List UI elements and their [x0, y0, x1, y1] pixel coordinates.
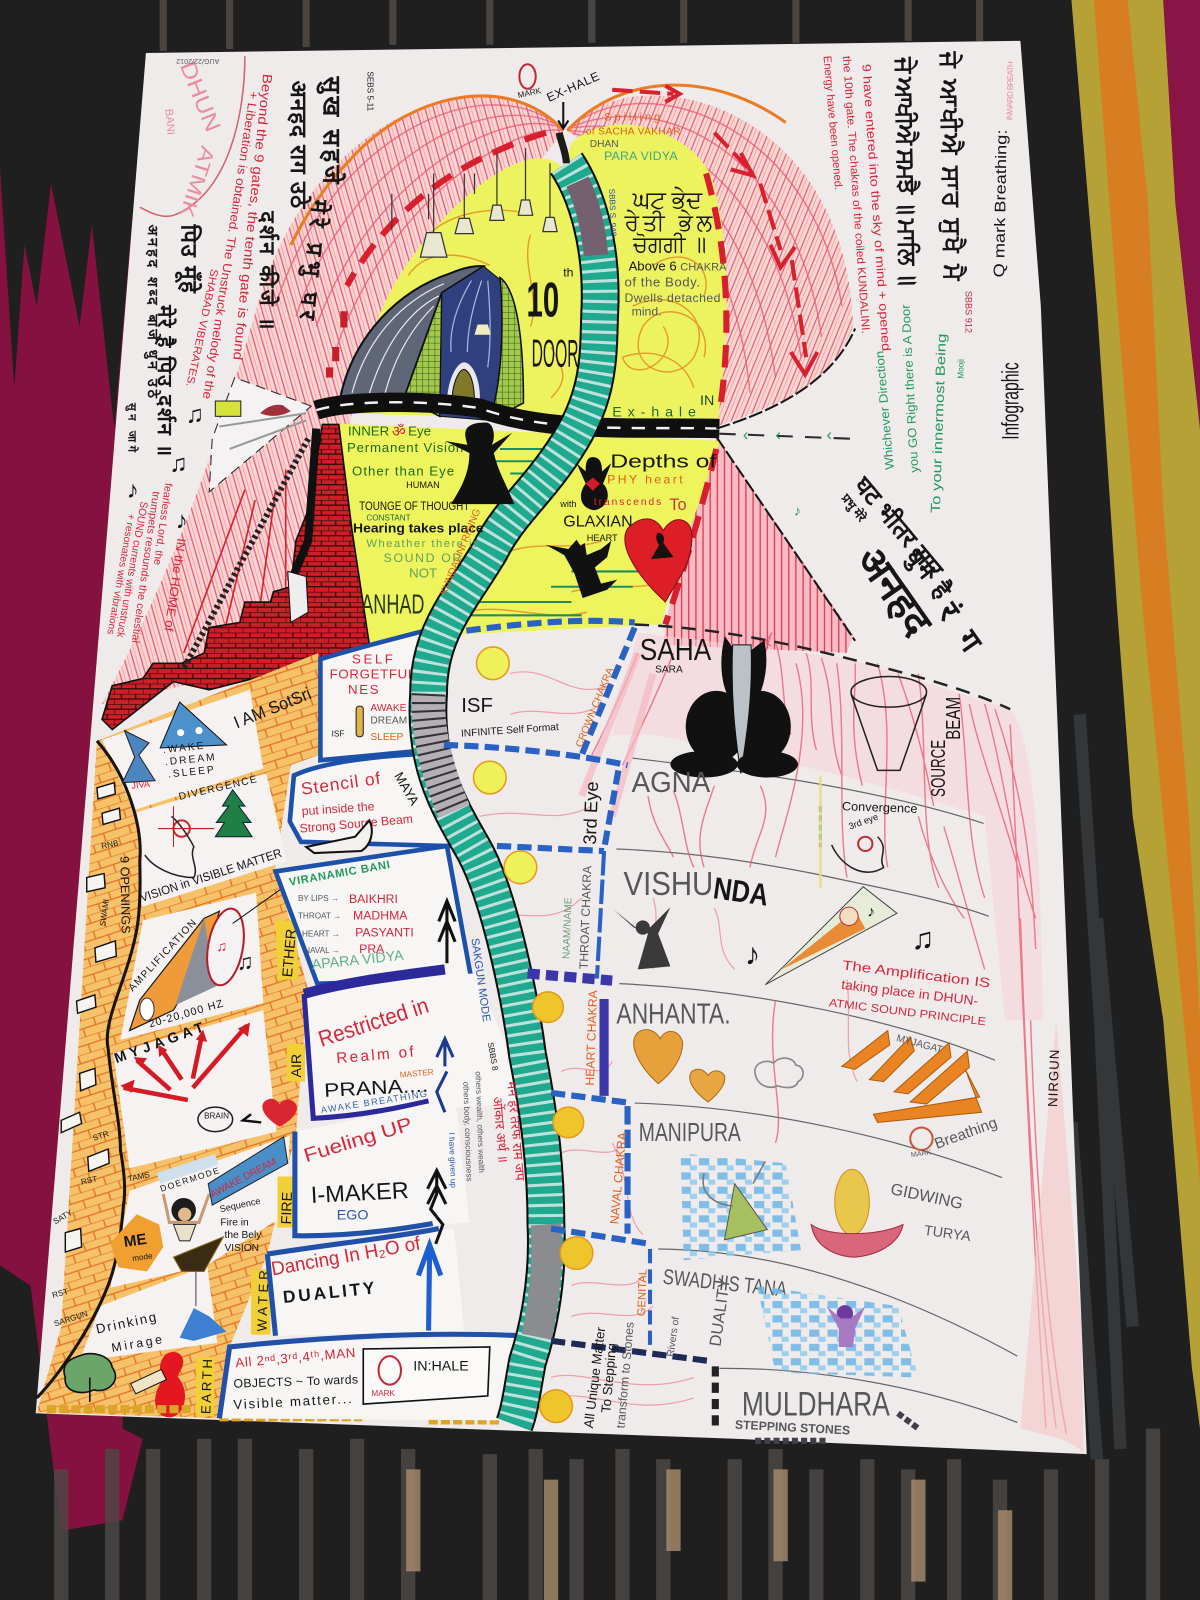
gurmukhi verse centre: ਰੇਤੀ ਭੇਲ — [623, 210, 712, 236]
earth label: EARTH — [198, 1359, 215, 1414]
convergence eye: Convergence — [842, 799, 918, 816]
panel: self forgetful: ISF — [332, 730, 344, 739]
tenth door dome — [340, 266, 523, 420]
hindi verse columns left — [125, 76, 346, 456]
panel: viranamic bani: PASYANTI — [355, 926, 414, 940]
chakra name: muldhara: STEPPING STONES — [735, 1418, 850, 1438]
depths of heart text: GLAXIAN — [563, 514, 633, 531]
whirling dervish figures — [445, 422, 617, 598]
brick gate labels: RST — [51, 1287, 69, 1300]
vertical notes and sakgun mode: SBBS 8 — [486, 1042, 500, 1072]
yellow inner field upper — [342, 125, 727, 423]
q mark breathing: Q mark Breathing: — [991, 129, 1011, 278]
top right hindi columns: ਜੇ ਆਖੀਐ ਸਾਰ ਸੁਖੈ ਮੈ — [935, 51, 968, 282]
hindi verse columns left: मेरे है पिउ दर्शन ॥ — [153, 304, 177, 456]
mark breathing — [910, 1114, 1000, 1159]
musical notes left — [127, 401, 204, 535]
depths of heart text: HEART — [587, 533, 618, 543]
hindi verse columns left: अनहद राग उठे — [286, 81, 312, 209]
chakra name: swadhistana: To Stepping — [598, 1343, 619, 1414]
depths of heart text: with — [559, 499, 577, 509]
arrows on right cone: ♪ — [794, 503, 801, 519]
panel: fueling up — [295, 1098, 469, 1236]
myjagat arrows panel: BRAIN — [204, 1111, 229, 1120]
amplification cone right: ♪ — [745, 937, 760, 971]
top-left title: dhun atmik bani: BANI — [162, 108, 177, 136]
panel: restricted — [304, 969, 531, 1118]
chakra name: swadhistana: SWADHIS TANA — [662, 1265, 789, 1302]
red verse: beyond the nine gates — [183, 73, 275, 400]
q mark breathing: INWARD BREATH — [1005, 61, 1015, 120]
meditating black figure — [670, 640, 798, 778]
ether label: ETHER — [280, 928, 300, 978]
panel: self forgetful: AWAKE — [370, 703, 407, 714]
divergence panel: VISION in VISIBLE MATTER — [138, 846, 284, 905]
hearing text: NOT — [409, 566, 437, 581]
nine openings boundary curve — [37, 741, 140, 1398]
panel: fueling up: EGO — [337, 1207, 368, 1223]
tenth door heading — [527, 266, 579, 375]
inner eye text: ॐ — [392, 424, 406, 441]
panel: restricted: AWAKE BREATHING — [320, 1089, 428, 1115]
panel: viranamic bani: THROAT → — [298, 911, 341, 920]
dancer with me-mode: Sequence — [219, 1196, 261, 1214]
brick gate labels: RST — [80, 1174, 98, 1187]
drinking mirage: Drinking — [94, 1309, 157, 1337]
gidwing turiya: GIDWING — [889, 1180, 965, 1213]
green door verse: Whichever Direction — [872, 350, 897, 470]
red dashed lobe edge — [347, 133, 726, 624]
brick gate labels: TAMS — [127, 1170, 151, 1184]
road — [316, 402, 719, 429]
panel: inhale ground: MARK — [371, 1389, 396, 1398]
chakra name: vishunda — [561, 865, 771, 969]
chakra name: anhanta: ANHANTA. — [616, 998, 731, 1030]
panel: inhale ground: IN:HALE — [413, 1358, 469, 1374]
water and purple figure — [757, 1286, 918, 1378]
brain cloud — [755, 1058, 803, 1088]
wake dream sleep panel: JIVA — [131, 779, 151, 791]
red verse: beyond the nine gates: Beyond the 9 gates, the tenth gate is found — [230, 73, 275, 361]
saha heading: SARA — [655, 664, 683, 675]
mark box — [363, 1347, 490, 1404]
panel: self forgetful: FORGETFUL — [330, 667, 415, 682]
chakra name: agna: AGNA — [632, 767, 710, 799]
panel: self forgetful — [320, 624, 449, 760]
top mark and ex-hale: EX-HALE — [545, 69, 601, 105]
spilling text: PARA VIDYA — [604, 149, 678, 163]
dancer with me-mode: the Bely — [224, 1230, 262, 1241]
top right hindi columns — [890, 51, 968, 286]
fire label: FIRE — [279, 1192, 296, 1225]
ether label — [275, 920, 300, 980]
pebble edge — [47, 1409, 500, 1420]
inner eye text: Other than Eye — [352, 464, 454, 479]
above six chakras note: of the Body. — [624, 275, 700, 290]
red verse: beyond the nine gates: SHABAD VIBERATES. — [183, 268, 220, 388]
brick gate labels: RNB — [101, 838, 120, 851]
divergence panel — [138, 774, 284, 905]
panel: restricted: PRANA.... — [324, 1075, 429, 1102]
tenth door heading: th — [563, 266, 574, 280]
myjagat arrows panel — [112, 1020, 297, 1132]
water and dancer manipura — [681, 1153, 801, 1260]
orange myjagat arrows — [842, 1031, 982, 1122]
white gate doors — [61, 783, 120, 1252]
hearing text: TOUNGE OF THOUGHT — [359, 499, 470, 513]
chakra name: swadhistana: DUALITY — [707, 1277, 734, 1347]
hindi verse columns left: पिउ मूँहे — [175, 223, 203, 294]
amplification panel: ♫ — [237, 949, 254, 974]
hindi verse columns left: सुख सहजे — [316, 76, 346, 185]
top right red verse: the 10th gate. The chakras of the coiled KUNDALINI. — [840, 55, 871, 334]
large hindi verse diagonal: रंग — [930, 596, 989, 659]
dancer with me-mode — [110, 1137, 288, 1341]
red verse: in the home: fearless Lord, the — [151, 482, 174, 566]
dancer with me-mode: DOERMODE — [159, 1165, 220, 1194]
red verse: in the home — [104, 482, 188, 644]
gurmukhi verse centre: ਚੋਗਗੀ ॥ — [632, 232, 706, 257]
gidwing turiya: TURYA — [923, 1223, 972, 1245]
hearing text: CONSTANT — [366, 513, 411, 522]
wake dream sleep panel: .WAKE — [162, 741, 206, 756]
exhale in: Ex-hale — [612, 404, 696, 420]
chakra name: muldhara: MULDHARA — [742, 1385, 890, 1423]
top-left title: dhun atmik bani: AUG/22/2012 — [176, 57, 219, 65]
chakra name: agna — [579, 767, 710, 845]
musical notes left: ♪ — [176, 508, 188, 535]
panel: inhale ground: OBJECTS ~ To wards — [233, 1372, 358, 1391]
chakra name: manipura — [607, 1119, 741, 1225]
amplification cone right: The Amplification IS — [841, 957, 991, 991]
air label — [287, 1044, 305, 1082]
amplification cone right: ♪ — [867, 903, 875, 920]
ascending arrows — [418, 901, 455, 1331]
panel: self forgetful: SLEEP — [370, 732, 403, 743]
spine: kundalini ribbon — [428, 133, 600, 1424]
icon: heart — [262, 1099, 297, 1127]
depths of heart text: transcends — [594, 497, 661, 508]
vertical notes and sakgun mode: SAKGUN MODE — [468, 938, 492, 1023]
dancer with me-mode: Fire in — [220, 1218, 249, 1229]
drinking mirage: Mirage — [110, 1332, 163, 1355]
chakra name: crown: CROWN CHAKRA — [574, 666, 616, 749]
chakra lines grey curves — [616, 758, 1017, 1422]
large hindi verse diagonal: धुन है — [899, 542, 957, 605]
chakra name: muldhara — [735, 1385, 918, 1441]
arrows on right cone: ‹ — [743, 426, 748, 444]
fire label — [278, 1177, 296, 1228]
amplification panel: ♫ — [216, 939, 227, 955]
chakra name: swadhistana: GENITAL — [636, 1269, 650, 1316]
hearing text: Hearing takes place — [353, 521, 484, 536]
red verse: in the home: SOUND currents with unstruck — [114, 500, 150, 639]
panel: restricted: MASTER — [399, 1068, 434, 1080]
arrows on the fan — [612, 90, 806, 357]
top right red verse: Energy have been opened. — [820, 55, 844, 191]
red heart with meditator — [625, 519, 692, 602]
depths of heart text: PHY heart — [607, 473, 683, 487]
panel: stencil: Stencil of — [300, 768, 382, 799]
dancer with me-mode: AWAKE DREAM — [208, 1156, 279, 1201]
hearing text — [353, 189, 618, 619]
infographic label: Infographic — [997, 362, 1024, 440]
gurmukhi verse centre — [623, 187, 712, 257]
nine openings label: 9 OPENINGS — [117, 856, 133, 934]
left road cone — [209, 378, 311, 492]
panel: inhale ground — [219, 1334, 520, 1420]
brick gate labels: SWAMI — [98, 898, 111, 927]
panel: viranamic bani: MADHMA — [353, 908, 408, 922]
source beam cone — [851, 677, 965, 797]
brick gate labels: SATY — [52, 1208, 75, 1226]
chakra name: vishunda: THROAT CHAKRA — [577, 865, 594, 969]
icon: gold hearts — [634, 1030, 683, 1084]
hearing text: KUNDALINI RISING — [439, 507, 483, 597]
poster sheet — [36, 41, 1087, 1454]
spilling text — [586, 111, 681, 163]
chakra name: agna: 3rd Eye — [579, 781, 602, 845]
hearing text: SOUND OR — [384, 551, 461, 565]
green door verse — [872, 304, 965, 513]
white vision panels — [80, 690, 290, 1361]
musical notes left: ♫ — [169, 450, 188, 477]
nirgun label: NIRGUN — [1045, 1048, 1062, 1107]
yellow inner field lower — [335, 423, 720, 645]
panel: viranamic bani: BAIKHRI — [349, 892, 398, 906]
wake dream sleep panel: .SLEEP — [168, 765, 216, 781]
dancer with me-mode: ME — [123, 1231, 148, 1251]
chakra name: swadhistana: transform to Stones — [614, 1321, 637, 1429]
panel: self forgetful: NES — [348, 682, 379, 697]
inner eye text: Eye — [408, 424, 431, 439]
orange brick wall — [37, 653, 318, 1418]
hearing text: ANHAD — [361, 588, 424, 619]
top-left title: dhun atmik bani: DHUN — [175, 58, 226, 135]
mark breathing: Breathing — [932, 1114, 1000, 1153]
saha heading: SAHA — [640, 633, 712, 667]
gidwing turiya — [889, 1180, 972, 1245]
drinking mirage — [64, 1309, 185, 1417]
green door verse: Mooji — [956, 359, 965, 379]
air label: AIR — [289, 1054, 305, 1078]
convergence eye — [820, 776, 918, 888]
vertical notes and sakgun mode: others body, consciousness — [461, 1081, 474, 1182]
panel: viranamic bani: NAVAL → — [304, 946, 340, 955]
tenth door heading: 10 — [527, 273, 559, 327]
chakra name: manipura: MANIPURA — [639, 1119, 741, 1147]
diya lamp and flame — [811, 1169, 903, 1257]
hanging bells — [392, 148, 557, 257]
panel: restricted: Restricted in — [315, 993, 432, 1052]
dancing figure throat — [613, 907, 670, 969]
amplification cone right: taking place in DHUN- — [840, 977, 979, 1009]
green door verse: you GO Right there is A Door — [899, 304, 921, 473]
red verse: beyond the nine gates: + Liberation is obtained. The Unstruck melody of the — [200, 90, 261, 400]
large hindi verse diagonal: घट भीतर सार — [848, 470, 950, 584]
amplification cone right — [745, 887, 991, 1028]
arrows on right cone: ‹ — [776, 426, 781, 444]
mark breathing: MARK — [910, 1148, 932, 1159]
gurmukhi verse centre: ਘਟ ਭੇਦ — [632, 187, 703, 214]
top-left title: dhun atmik bani: ATMIK — [174, 143, 218, 220]
chakra name: vishunda: NDA — [711, 871, 771, 913]
orange myjagat arrows: MYJAGAT — [895, 1033, 944, 1056]
amplification panel — [127, 886, 286, 1031]
water label: WATER — [254, 1270, 271, 1332]
wake dream sleep panel: I AM SotSri — [231, 683, 314, 732]
chakra dashed borders — [444, 621, 1010, 1428]
depths of heart text: Depths of — [610, 450, 718, 471]
red brick tower and stepped city — [102, 424, 369, 730]
top mark and ex-hale: MARK — [517, 86, 542, 100]
above six chakras note — [624, 258, 727, 318]
chakra name: vishunda: VISHU — [623, 866, 713, 903]
vertical notes and sakgun mode: others wealth, others wealth — [474, 1071, 486, 1173]
source beam cone: BEAM — [943, 697, 965, 740]
vertical notes and sakgun mode — [447, 938, 528, 1188]
scribbles — [408, 210, 706, 615]
depths of heart text: To — [669, 496, 687, 514]
panel: viranamic bani: HEART → — [302, 930, 340, 939]
chakra name: anhanta — [583, 989, 731, 1102]
convergence eye: 3rd eye — [847, 812, 879, 831]
inner eye text — [347, 424, 463, 490]
top mark and ex-hale — [517, 64, 601, 129]
vertical notes and sakgun mode: I have given up — [447, 1132, 458, 1188]
dashed breath line with arrows — [719, 434, 852, 439]
hindi verse columns left: सुन जागे — [125, 402, 140, 453]
chakra name: vishunda: NAAM/NAME — [561, 897, 575, 959]
panel: viranamic bani — [276, 846, 471, 984]
panel: stencil — [290, 753, 480, 853]
large hindi verse diagonal: प्रभु मेरे — [837, 490, 870, 526]
top right hindi columns: ਜੇ ਆਖੀਐ ਸਮਝੈ ॥ ਮਾਲਿ ॥ — [890, 56, 923, 286]
source beam cone: SOURCE — [928, 740, 950, 797]
panel: viranamic bani: VIRANAMIC BANI — [288, 859, 391, 889]
panel: dancing — [267, 1229, 464, 1336]
panel: inhale ground: Visible matter... — [233, 1391, 352, 1412]
amplification panel: AMPLIFICATION — [127, 918, 199, 994]
panel: inhale ground: All 2ⁿᵈ,3ʳᵈ,4ᵗʰ,MAN — [235, 1345, 356, 1370]
spilling text: Spilling — [604, 111, 660, 123]
panel: fueling up: Fueling UP — [301, 1113, 415, 1167]
panel: self forgetful: SELF — [352, 651, 393, 666]
white right cone outline — [716, 329, 855, 641]
q mark breathing — [991, 61, 1015, 278]
chakra name: swadhistana: Rivers of — [666, 1316, 682, 1358]
above six chakras note: mind. — [632, 304, 662, 318]
wake dream sleep panel: .DREAM — [164, 752, 217, 768]
large hindi verse diagonal — [837, 470, 989, 659]
divergence panel: DIVERGENCE — [178, 774, 258, 803]
panel: viranamic bani: BY LIPS → — [298, 894, 339, 903]
icon: red figure — [155, 1352, 185, 1417]
panel: dancing: DUALITY — [282, 1278, 376, 1307]
arrows on right cone — [743, 426, 832, 519]
above six chakras note: Above 6 CHAKRA — [629, 258, 727, 273]
panel: self forgetful: DREAM — [370, 715, 407, 726]
hearing text: Wheather there is — [366, 538, 479, 550]
inner eye text: Permanent Vision — [347, 440, 463, 455]
dancer with me-mode: mode — [132, 1251, 154, 1263]
panel: restricted: Realm of — [336, 1043, 415, 1067]
hearing text: SBBS S. 948 — [607, 189, 618, 237]
brick gate labels: STR — [92, 1129, 110, 1143]
pink falling lines lower right — [480, 633, 1084, 1453]
chakra name: crown: ISF — [461, 695, 493, 717]
spilling text: of SACHA VAKHAR — [586, 127, 681, 138]
musical notes left: ♪ — [127, 477, 139, 504]
white road wedge tint — [184, 469, 286, 653]
exhale in: IN — [700, 393, 714, 409]
panel: stencil: MAYA — [391, 770, 422, 808]
musical notes left: ♫ — [186, 401, 204, 428]
text: DOOR — [532, 332, 579, 375]
chakra name: anhanta: HEART CHAKRA — [583, 989, 600, 1086]
green door verse: To your innermost Being — [928, 333, 949, 513]
small date note right: SBBS 912 — [963, 291, 973, 333]
icon: jiva hourglass — [122, 731, 155, 783]
inner eye text: INNER — [348, 424, 389, 439]
chakra name: crown: INFINITE Self Format — [461, 722, 559, 740]
chakra name: swadhistana — [581, 1265, 789, 1429]
panel: viranamic bani: PRA — [359, 942, 385, 956]
panel: stencil: Strong Source Beam — [299, 812, 413, 836]
chakra name: crown — [461, 666, 616, 749]
amplification cone right: ♫ — [911, 922, 934, 956]
panel: viranamic bani: APARA VIDYA — [311, 948, 405, 973]
depths of heart text — [559, 450, 718, 543]
above six chakras note: Dwells detached — [624, 291, 721, 305]
hindi verse columns left: अनहद शब्द बाजे धुन उठे — [143, 224, 162, 399]
top right red verse: 9 have entered into the sky of mind + opened — [859, 64, 893, 352]
large hindi verse diagonal: अनहद — [848, 538, 942, 645]
red verse: in the home: + resonates with vibrations — [104, 513, 136, 635]
red verse: in the home: trumpets resounds the celestial — [129, 490, 162, 644]
panel: stencil: put inside the — [301, 799, 375, 818]
inner eye text: HUMAN — [406, 480, 440, 490]
red verse: in the home: IN the HOME of — [161, 537, 188, 633]
hindi verse columns left: दर्शन कीजे ॥ — [255, 210, 280, 330]
chakra name: swadhistana: All Unique Matter — [581, 1326, 608, 1429]
icon: tree — [64, 1354, 115, 1402]
chakra seed circles — [473, 647, 593, 1422]
hindi verse columns left: मेरे प्रभु घर — [293, 197, 333, 322]
top right red verse — [820, 55, 893, 352]
panel: dancing: Dancing In H₂O of — [269, 1232, 423, 1280]
exhale in — [612, 393, 714, 420]
chakra name: manipura: NAVAL CHAKRA — [607, 1131, 629, 1225]
panel: fueling up: I-MAKER — [310, 1177, 409, 1208]
wake dream sleep panel — [122, 683, 314, 791]
amplification cone right: ATMIC SOUND PRINCIPLE — [828, 997, 987, 1028]
myjagat arrows panel: MYJAGAT — [112, 1020, 206, 1067]
vertical notes and sakgun mode: ओंकार अर्थ ॥ — [490, 1096, 511, 1163]
small date note: SEBS 5-11 — [365, 71, 374, 112]
top-left title: dhun atmik bani — [140, 56, 245, 220]
dancer with me-mode: VISION — [224, 1243, 259, 1254]
arrows on right cone: ‹ — [827, 426, 832, 444]
top lobes: pink sound fans — [102, 85, 853, 704]
amplification panel: 20-20,000 HZ — [148, 998, 225, 1030]
brick gate labels — [51, 838, 151, 1328]
green hatch strokes — [439, 449, 643, 615]
vertical notes and sakgun mode: मन हर तरफ राम जप — [504, 1081, 528, 1182]
brick gate labels: SARGUN — [53, 1309, 89, 1328]
spilling text: DHAN — [590, 139, 619, 150]
